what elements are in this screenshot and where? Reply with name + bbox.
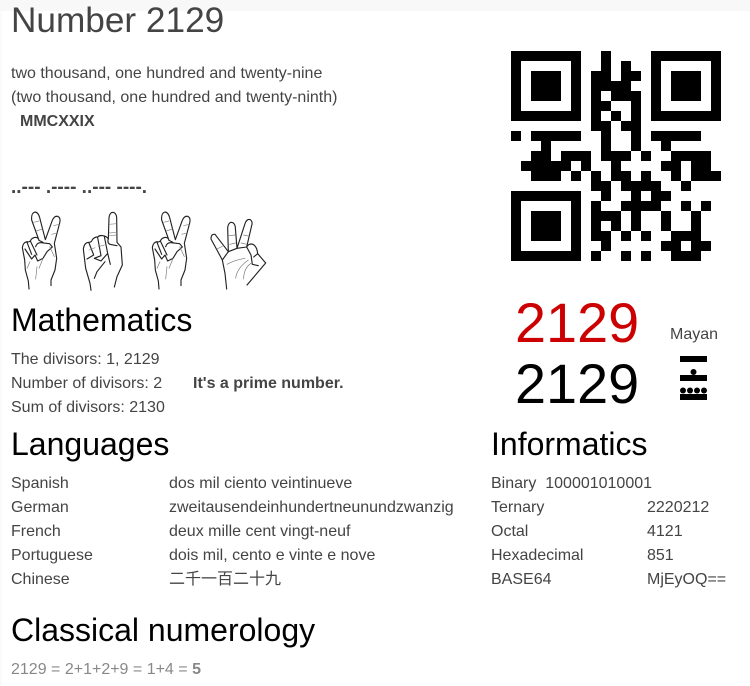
- French value: deux mille cent vingt-neuf: [169, 523, 350, 540]
- numerology sum: 2129 = 2+1+2+9 = 1+4 = 5: [11, 661, 201, 678]
- informatics table: [491, 475, 726, 588]
- Hexadecimal value: 851: [647, 547, 674, 564]
- Chinese: Chinese: [11, 571, 70, 588]
- number in words: two thousand, one hundred and twenty-nine: [11, 65, 322, 82]
- BASE64 value: MjEyOQ==: [647, 571, 726, 588]
- icon: hand one: [83, 212, 122, 290]
- divisors: The divisors: 1, 2129: [11, 351, 160, 368]
- Octal value: 4121: [647, 523, 683, 540]
- QR code: [511, 51, 721, 261]
- Portuguese value: dois mil, cento e vinte e nove: [169, 547, 375, 564]
- Ternary: Ternary: [491, 499, 544, 516]
- Spanish: Spanish: [11, 475, 69, 492]
- German: German: [11, 499, 69, 516]
- left margin strip: [0, 11, 2, 686]
- icon: Mayan numeral: [680, 356, 707, 400]
- title: Number 2129: [11, 1, 224, 40]
- heading: Mathematics: Mathematics: [11, 302, 192, 338]
- sum of divisors: Sum of divisors: 2130: [11, 399, 165, 416]
- Hexadecimal: Hexadecimal: [491, 547, 583, 564]
- roman numeral: MMCXXIX: [20, 113, 95, 130]
- language table: [11, 475, 454, 588]
- top grey band: [0, 0, 750, 11]
- ordinal in words: (two thousand, one hundred and twenty-ninth): [11, 89, 337, 106]
- heading: Languages: Languages: [11, 426, 169, 462]
- heading: Informatics: Informatics: [491, 426, 647, 462]
- Ternary value: 2220212: [647, 499, 709, 516]
- Mayan label: Mayan: [670, 326, 718, 343]
- prime note: It's a prime number.: [193, 375, 344, 392]
- German value: zweitausendeinhundertneunundzwanzig: [169, 499, 454, 516]
- icon: hand two: [152, 212, 190, 289]
- Binary: Binary 100001010001: [491, 475, 652, 492]
- sign language hands: [22, 211, 266, 291]
- BASE64: BASE64: [491, 571, 551, 588]
- red number: 2129: [515, 291, 639, 354]
- heading: Classical numerology: Classical numerology: [11, 612, 315, 648]
- Portuguese: Portuguese: [11, 547, 93, 564]
- number of divisors: Number of divisors: 2: [11, 375, 162, 392]
- black number: 2129: [515, 352, 639, 415]
- French: French: [11, 523, 61, 540]
- icon: hand three: [211, 219, 266, 289]
- Octal: Octal: [491, 523, 528, 540]
- icon: hand two: [22, 212, 60, 289]
- Chinese value: 二千一百二十九: [169, 571, 281, 588]
- Spanish value: dos mil ciento veintinueve: [169, 475, 352, 492]
- morse code: ..--- .---- ..--- ----.: [11, 177, 147, 198]
